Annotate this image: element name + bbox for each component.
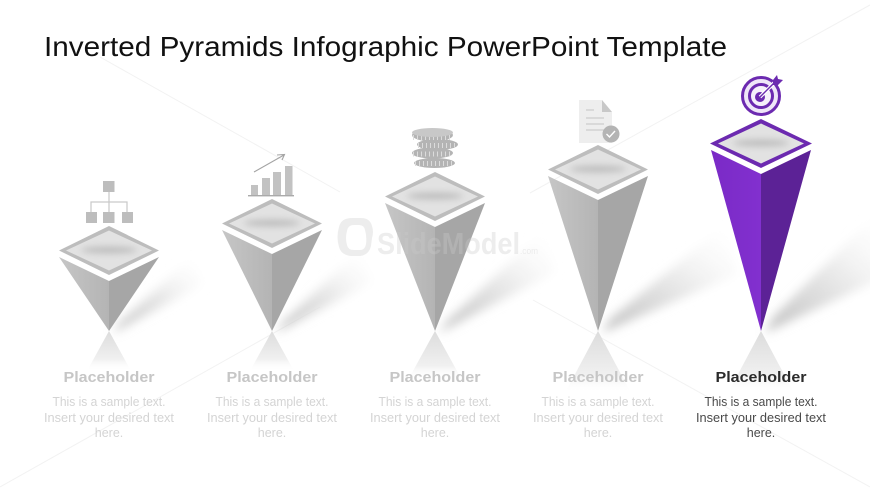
pyramid 2: [222, 199, 322, 331]
reflection 3: [408, 331, 462, 380]
text block 2: This is a sample text.: [216, 395, 328, 409]
text block 5 (highlighted): Insert your desired text: [696, 411, 827, 425]
icon: target with arrow: [742, 75, 783, 114]
text block 1: Placeholder: [64, 369, 155, 386]
icon: org chart: [86, 181, 133, 223]
text block 3: here.: [421, 426, 449, 440]
pyramid 5 (highlighted): [710, 119, 812, 331]
pyramid 3: [385, 172, 485, 331]
text block 3: [370, 369, 501, 440]
reflection 1: [87, 331, 131, 371]
text block 5 (highlighted): [696, 369, 827, 440]
floor shadow 4: [602, 225, 737, 333]
text block 4: here.: [584, 426, 612, 440]
text block 4: [533, 369, 664, 440]
reflection 5: [728, 331, 794, 393]
text block 3: Placeholder: [390, 369, 481, 386]
icon: document with check: [579, 100, 620, 143]
floor shadow 2: [276, 250, 372, 333]
floor shadow 3: [439, 230, 555, 333]
text block 4: This is a sample text.: [542, 395, 654, 409]
reflection 2: [250, 331, 294, 371]
pyramid 1: [59, 226, 159, 331]
title: Inverted Pyramids Infographic PowerPoint Template: [44, 31, 727, 62]
text block 1: Insert your desired text: [44, 411, 175, 425]
text block 4: Placeholder: [552, 369, 644, 386]
text block 1: here.: [95, 426, 123, 440]
text block 5 (highlighted): Placeholder: [716, 369, 807, 386]
text block 2: [207, 369, 338, 440]
text block 2: Placeholder: [226, 369, 318, 386]
icon: coin stack: [412, 128, 458, 168]
icon: growth chart: [248, 154, 294, 196]
pyramid 4: [548, 145, 648, 331]
text block 2: here.: [258, 426, 286, 440]
floor shadow 1: [113, 256, 203, 333]
text block 2: Insert your desired text: [207, 411, 338, 425]
text block 5 (highlighted): here.: [747, 426, 775, 440]
text block 3: This is a sample text.: [378, 395, 492, 409]
floor shadow 5: [765, 215, 870, 333]
watermark: SlideModel.com: .com: [520, 246, 538, 256]
text block 4: Insert your desired text: [533, 411, 664, 425]
text block 1: [44, 369, 175, 440]
text block 1: This is a sample text.: [52, 395, 166, 409]
text block 5 (highlighted): This is a sample text.: [704, 395, 818, 409]
watermark: SlideModel.com: SlideModel: [377, 226, 520, 261]
watermark: SlideModel.com: [338, 218, 538, 261]
reflection 4: [565, 331, 631, 393]
text block 3: Insert your desired text: [370, 411, 501, 425]
